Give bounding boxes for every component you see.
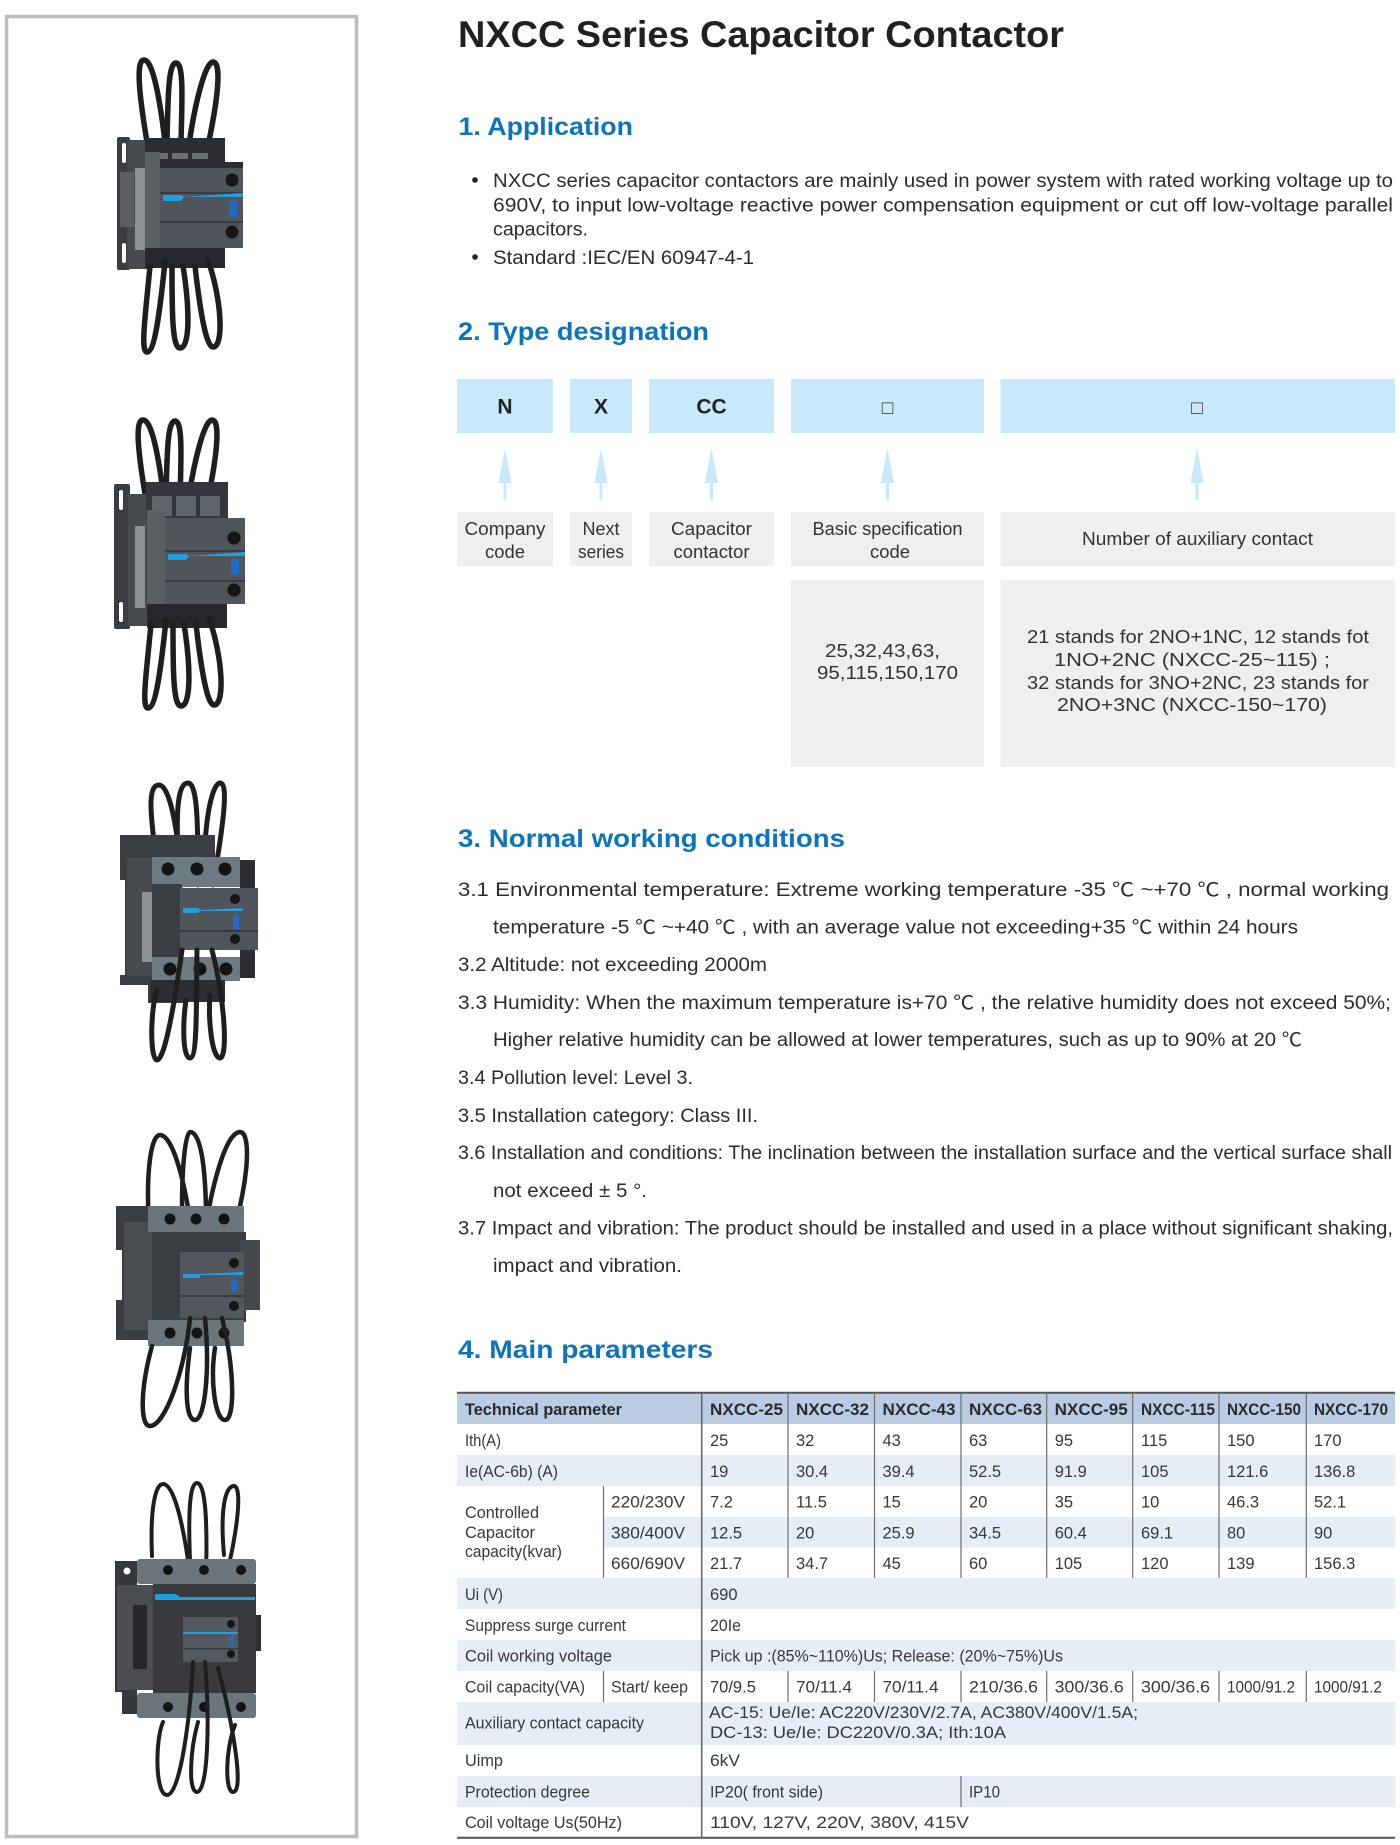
row: 660/690V: 156.3 [1314, 1555, 1355, 1573]
row: 660/690V: 660/690V [611, 1555, 685, 1573]
row: 220/230V: 20 [969, 1494, 987, 1512]
row: coil working voltage: Pick up :(85%~110%)Us; Release: (20%~75%)Us [710, 1648, 1063, 1666]
panel: product photo column [6, 16, 356, 1836]
row: coil voltage: Coil voltage Us(50Hz) [465, 1814, 622, 1832]
row: protection degree: Protection degree [465, 1784, 590, 1802]
row: coil working voltage: Coil working voltage [465, 1648, 612, 1666]
row: 660/690V: 60 [969, 1555, 987, 1573]
bullet text 1: 690V, to input low-voltage reactive power compensation equipment or cut off low-voltage parallel [493, 196, 1393, 216]
panel: auxiliary contact values: 32 stands for 3NO+2NC, 23 stands for [1027, 672, 1369, 693]
panel: type designation [457, 318, 1395, 767]
panel: specification code values: 95,115,150,170 [817, 662, 958, 683]
row: 380/400V: 60.4 [1055, 1524, 1087, 1542]
row: Ith: Ith(A) [465, 1432, 501, 1450]
row: 220/230V: 15 [882, 1494, 901, 1512]
row: coil capacity: Start/ keep [611, 1678, 688, 1696]
row: Ith: 150 [1227, 1432, 1255, 1450]
condition 3.6 [458, 1143, 1392, 1202]
arrow: next series [594, 448, 608, 500]
condition 3.4: 3.4 Pollution level: Level 3. [458, 1068, 693, 1089]
row: 660/690V [611, 1555, 1355, 1573]
bullet dot 1 [472, 177, 478, 183]
row: 660/690V: 21.7 [710, 1555, 742, 1573]
row: 220/230V: 7.2 [710, 1494, 733, 1512]
condition 3.2: 3.2 Altitude: not exceeding 2000m [458, 955, 767, 976]
row: coil capacity: Coil capacity(VA) [465, 1678, 585, 1696]
condition 3.1: 3.1 Environmental temperature: Extreme working temperature -35 ℃ ~+70 ℃ , normal working [458, 880, 1389, 901]
row label: controlled capacitor capacity [465, 1504, 562, 1561]
arrow: company code [498, 448, 512, 500]
row: coil capacity: 70/9.5 [710, 1678, 756, 1696]
row: coil working voltage [465, 1648, 1063, 1666]
bullet text 1 [493, 171, 1393, 240]
panel: specification code values: 25,32,43,63, [825, 640, 940, 661]
condition 3.3 [458, 993, 1391, 1051]
row: Ith: 115 [1141, 1432, 1167, 1450]
row: suppress surge current: 20Ie [710, 1617, 741, 1635]
row: Ie: 136.8 [1314, 1463, 1355, 1481]
label: capacitor contactor [649, 512, 774, 566]
row: coil capacity: 210/36.6 [969, 1678, 1038, 1696]
condition 3.1: temperature -5 ℃ ~+40 ℃ , with an average value not exceeding+35 ℃ within 24 hours [493, 918, 1298, 938]
condition 3.7 [458, 1218, 1393, 1277]
table header row [465, 1401, 1388, 1419]
row: Ith: 32 [796, 1432, 814, 1450]
condition 3.6: 3.6 Installation and conditions: The inclination between the installation surface and the vertical surface shall [458, 1143, 1392, 1164]
row: coil voltage: 110V, 127V, 220V, 380V, 415V [710, 1814, 969, 1832]
row: 660/690V: 139 [1227, 1555, 1255, 1573]
table header row: NXCC-150 [1227, 1401, 1301, 1419]
condition 3.6: not exceed ± 5 °. [493, 1181, 647, 1202]
row: suppress surge current: Suppress surge current [465, 1617, 626, 1635]
table header row: NXCC-43 [882, 1401, 956, 1419]
row: coil capacity: 300/36.6 [1141, 1678, 1210, 1696]
code box specification placeholder [791, 379, 984, 433]
bullet text 1: capacitors. [493, 220, 588, 240]
row: Ith [465, 1432, 1342, 1450]
row: 380/400V: 12.5 [710, 1524, 742, 1542]
label: next series: series [578, 541, 624, 562]
label: capacitor contactor: Capacitor [671, 518, 752, 539]
row: Ith: 43 [882, 1432, 901, 1450]
label: number of auxiliary contact [1000, 512, 1395, 566]
product image: NXCC medium contactor [120, 783, 258, 1060]
row: 380/400V [611, 1524, 1332, 1542]
label: next series: Next [582, 518, 620, 539]
heading: type designation: 2. Type designation [458, 318, 709, 346]
condition 3.1 [458, 880, 1389, 938]
condition 3.5: 3.5 Installation category: Class III. [458, 1106, 758, 1127]
row: Ie: Ie(AC-6b) (A) [465, 1463, 558, 1481]
bullet text 1: NXCC series capacitor contactors are mainly used in power system with rated working voltage up to [493, 171, 1393, 192]
row: Ith: 170 [1314, 1432, 1342, 1450]
condition 3.3: Higher relative humidity can be allowed at lower temperatures, such as up to 90% at 20 ℃ [493, 1030, 1302, 1051]
panel: main parameters [457, 1336, 1395, 1838]
row: Uimp [465, 1752, 740, 1770]
row: Ie: 30.4 [796, 1463, 828, 1481]
code box N: N [497, 396, 513, 418]
row: 220/230V: 52.1 [1314, 1494, 1346, 1512]
row: 380/400V: 380/400V [611, 1524, 685, 1542]
row: Ie: 19 [710, 1463, 728, 1481]
row: 660/690V: 34.7 [796, 1555, 828, 1573]
label: company code: Company [464, 518, 546, 539]
table header row: NXCC-170 [1314, 1401, 1388, 1419]
row: Ie: 91.9 [1055, 1463, 1087, 1481]
panel: auxiliary contact values: 21 stands for 2NO+1NC, 12 stands fot [1027, 626, 1369, 647]
row: coil voltage [465, 1814, 969, 1832]
panel: auxiliary contact values [1000, 580, 1395, 767]
heading: normal working conditions: 3. Normal working conditions [458, 825, 845, 853]
row label: controlled capacitor capacity: capacity(kvar) [465, 1543, 562, 1561]
condition 3.3: 3.3 Humidity: When the maximum temperature is+70 ℃ , the relative humidity does not exceed 50%; [458, 993, 1391, 1014]
row: 220/230V: 10 [1141, 1494, 1159, 1512]
row: auxiliary contact capacity: AC-15: Ue/Ie: AC220V/230V/2.7A, AC380V/400V/1.5A; [709, 1704, 1138, 1722]
row label: controlled capacitor capacity: Controlled [465, 1504, 539, 1522]
label: number of auxiliary contact: Number of auxiliary contact [1082, 528, 1313, 549]
row: Ie [465, 1463, 1355, 1481]
row: 220/230V: 46.3 [1227, 1494, 1259, 1512]
label: company code [457, 512, 553, 566]
row: auxiliary contact capacity [465, 1704, 1138, 1742]
code box X [570, 379, 632, 433]
row: coil capacity [465, 1678, 1382, 1696]
row: auxiliary contact capacity: Auxiliary contact capacity [465, 1714, 645, 1732]
table header row: NXCC-32 [796, 1401, 869, 1419]
row: Ith: 25 [710, 1432, 728, 1450]
arrow: auxiliary contact [1190, 448, 1204, 500]
panel: normal working conditions [458, 825, 1393, 1277]
row: 380/400V: 90 [1314, 1524, 1332, 1542]
table header row: NXCC-63 [969, 1401, 1042, 1419]
product image: NXCC large contactor 2 [115, 1483, 261, 1795]
row: 660/690V: 45 [882, 1555, 901, 1573]
row: coil capacity: 1000/91.2 [1314, 1678, 1382, 1696]
row: 220/230V: 220/230V [611, 1494, 685, 1512]
row: coil capacity: 70/11.4 [796, 1678, 852, 1696]
row: Uimp: Uimp [465, 1752, 503, 1770]
bullet dot 2 [472, 254, 478, 260]
label: company code: code [485, 541, 525, 562]
table header row: Technical parameter [465, 1401, 623, 1419]
row: coil capacity: 1000/91.2 [1227, 1678, 1295, 1696]
code box specification placeholder: □ [882, 398, 894, 419]
row: Uimp: 6kV [710, 1752, 740, 1770]
code box auxiliary placeholder [1000, 379, 1395, 433]
panel: auxiliary contact values: 1NO+2NC (NXCC-25~115) ; [1054, 649, 1330, 670]
row: Ie: 121.6 [1227, 1463, 1268, 1481]
panel: specification code values [791, 580, 984, 767]
code box N [457, 379, 553, 433]
row: 380/400V: 25.9 [882, 1524, 915, 1542]
row: Ith: 95 [1055, 1432, 1073, 1450]
row: 380/400V: 80 [1227, 1524, 1245, 1542]
label: basic specification code: Basic specification [812, 518, 962, 539]
row: Ui: 690 [710, 1586, 738, 1604]
row: protection degree [465, 1784, 1000, 1802]
row: Ie: 39.4 [882, 1463, 915, 1481]
row: protection degree: IP20( front side) [710, 1784, 823, 1802]
label: next series [570, 512, 632, 566]
row: coil capacity: 300/36.6 [1055, 1678, 1124, 1696]
panel: application [458, 113, 1393, 269]
table header row: NXCC-25 [710, 1401, 783, 1419]
row label: controlled capacitor capacity: Capacitor [465, 1524, 535, 1542]
table header row: NXCC-95 [1055, 1401, 1128, 1419]
code box X: X [594, 396, 608, 418]
table: technical parameters [457, 1393, 1395, 1838]
row: protection degree: IP10 [969, 1784, 1000, 1802]
panel: auxiliary contact values: 2NO+3NC (NXCC-150~170) [1057, 694, 1327, 715]
label: basic specification code: code [870, 541, 910, 562]
condition 3.7: 3.7 Impact and vibration: The product should be installed and used in a place without significant shaking, [458, 1218, 1393, 1240]
row: Ie: 52.5 [969, 1463, 1001, 1481]
condition 3.7: impact and vibration. [493, 1256, 682, 1277]
arrow: capacitor contactor [705, 448, 718, 500]
arrow: basic specification [881, 448, 894, 500]
row: 380/400V: 69.1 [1141, 1524, 1173, 1542]
row: Ui [465, 1586, 738, 1604]
row: 380/400V: 20 [796, 1524, 814, 1542]
code box CC: CC [696, 396, 727, 418]
row: 220/230V: 35 [1055, 1494, 1073, 1512]
table header row: NXCC-115 [1141, 1401, 1215, 1419]
row: auxiliary contact capacity: DC-13: Ue/Ie: DC220V/0.3A; Ith:10A [710, 1724, 1006, 1742]
code box auxiliary placeholder: □ [1191, 398, 1203, 419]
heading: main parameters: 4. Main parameters [458, 1336, 713, 1364]
product image: NXCC small contactor 1 [117, 60, 243, 352]
title: NXCC Series Capacitor Contactor [458, 14, 1064, 55]
product image: NXCC small contactor 2 [114, 420, 245, 708]
row: Ie: 105 [1141, 1463, 1169, 1481]
heading: application: 1. Application [458, 113, 633, 141]
row: coil capacity: 70/11.4 [882, 1678, 938, 1696]
product image: NXCC large contactor 1 [116, 1132, 260, 1426]
row: 660/690V: 120 [1141, 1555, 1169, 1573]
row: 660/690V: 105 [1055, 1555, 1082, 1573]
row: 220/230V [611, 1494, 1346, 1512]
bullet text 2: Standard :IEC/EN 60947-4-1 [493, 248, 754, 269]
label: capacitor contactor: contactor [674, 541, 750, 562]
row: Ui: Ui (V) [465, 1586, 503, 1604]
row: Ith: 63 [969, 1432, 987, 1450]
label: basic specification code [791, 512, 984, 566]
code box CC [649, 379, 774, 433]
row: suppress surge current [465, 1617, 741, 1635]
row: 220/230V: 11.5 [796, 1494, 827, 1512]
row: 380/400V: 34.5 [969, 1524, 1001, 1542]
